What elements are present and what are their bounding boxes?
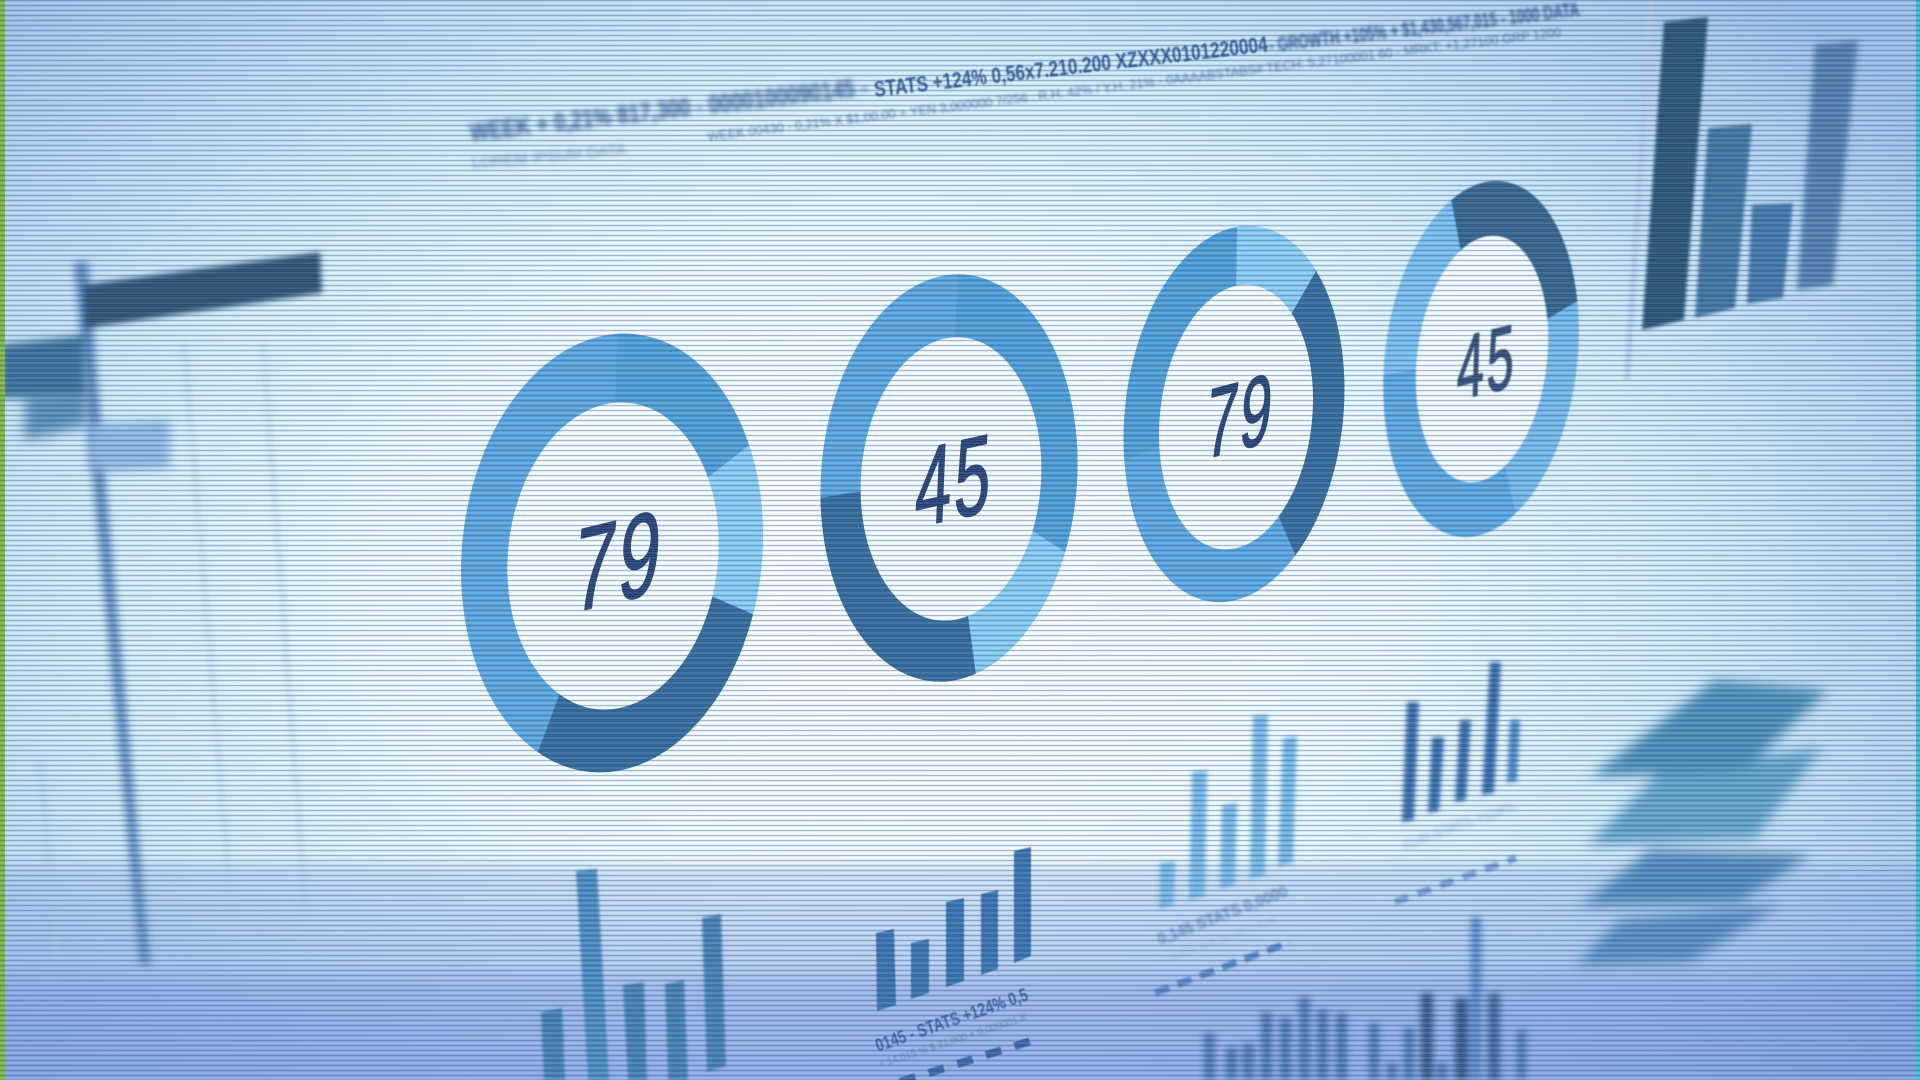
header third line: LOREM IPSUM DATA	[471, 142, 627, 172]
gantt chart: left blurred panel	[0, 252, 322, 965]
B dashes	[900, 1041, 1031, 1080]
D label: 0145 STATS +124%	[1401, 797, 1517, 853]
layer 4	[1575, 905, 1780, 966]
donut 2 number: 45	[913, 409, 996, 552]
C label: 0,145 STATS 0,0000	[1155, 882, 1290, 949]
A bar 2	[576, 869, 609, 1080]
D bars	[1402, 662, 1520, 822]
donut 2 centre	[851, 331, 1051, 627]
donut 3 number: 79	[1202, 352, 1279, 481]
donut 2: value 45	[851, 331, 1051, 627]
gantt medium bar upper part	[0, 335, 86, 398]
header second line: WEEK 00430 - 0,21% X $1,00.00 + YEN 3,000000 7/256 . R.H. 42% / Y.H. 21% - 0AAAABSTABS# TECH: 5,27100001 60 - MRKT: +1,27100 GRP 1200	[707, 24, 1562, 144]
gantt grid lines	[40, 343, 306, 960]
top right bar 2	[1695, 124, 1752, 318]
bottom bar chart B	[873, 847, 1031, 1080]
C bars	[1159, 714, 1297, 909]
D dashes	[1395, 858, 1516, 902]
header text lines	[468, 0, 1581, 172]
donut 1: value 79	[492, 392, 734, 720]
B sublabel: + 14,015 % $ 21,000 + 0,000001 X	[877, 1011, 1029, 1071]
gantt medium bar lower part	[25, 390, 88, 440]
bottom bar chart E: blurred cluster	[1204, 917, 1526, 1080]
donut 4 centre	[1402, 228, 1562, 490]
donut 1 centre	[492, 392, 734, 720]
C sublabel: + 14,015 % $ 21,000 + 0,00	[1157, 915, 1279, 968]
bottom bar chart A	[541, 869, 726, 1080]
layer 2	[1588, 748, 1822, 845]
donut 3 ring	[1169, 314, 1299, 514]
top right bar chart	[1624, 0, 1858, 380]
left edge green strip	[0, 0, 5, 1080]
layer 1	[1590, 680, 1828, 777]
A bar 1	[541, 1008, 565, 1080]
A bar 4	[665, 980, 688, 1080]
donut 4: value 45	[1402, 228, 1562, 490]
bottom bar chart D	[1395, 662, 1520, 902]
donut 2 ring	[878, 371, 1020, 585]
top right bar 1	[1642, 17, 1708, 330]
gantt vertical axis	[74, 262, 150, 965]
donut 3: value 79	[1145, 276, 1327, 558]
gantt dark bar	[83, 252, 322, 328]
top right bar 4	[1797, 40, 1858, 290]
top right bar 3	[1747, 203, 1793, 304]
donut 4 number: 45	[1456, 306, 1518, 420]
A bar 3	[623, 982, 647, 1080]
layer 3	[1580, 850, 1810, 906]
header main line, centre part: STATS +124% 0,56x7.210.200 XZXXX0101220004	[873, 32, 1270, 102]
donut 1 number: 79	[569, 484, 669, 639]
gantt light bar	[88, 420, 170, 472]
right edge teal strip	[1916, 0, 1920, 1080]
bottom bar chart C	[1155, 714, 1297, 993]
B label: 0145 - STATS +124% 0,5	[873, 985, 1031, 1056]
A bar 5	[702, 914, 726, 1072]
C dashes	[1155, 942, 1290, 993]
donut 3 centre	[1145, 276, 1327, 558]
E bars	[1204, 917, 1526, 1080]
header main line, left blurred part: WEEK + 0,21% 817,300 - 0000100090145 -	[468, 73, 869, 147]
top right axis line	[1624, 0, 1654, 380]
donut 1 ring	[526, 436, 698, 670]
donut 4 ring	[1422, 264, 1540, 454]
stacked layers icon	[1575, 680, 1828, 966]
B bars	[876, 847, 1031, 1011]
